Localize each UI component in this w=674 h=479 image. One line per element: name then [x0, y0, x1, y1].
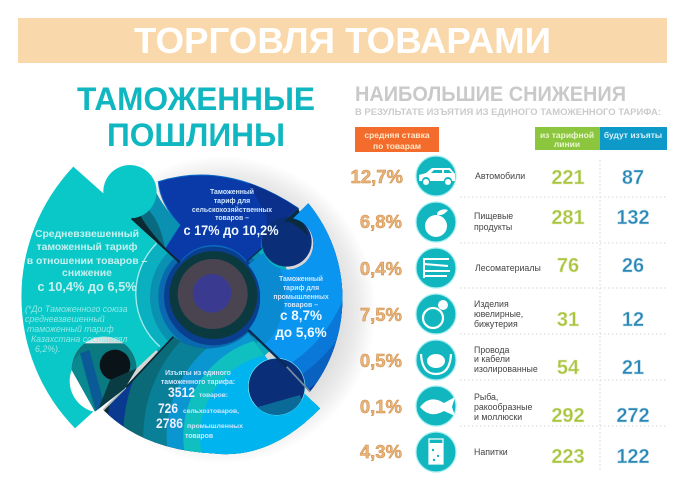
tab shadow: top-left stripes [132, 193, 180, 263]
text: removed goods: промышленных [187, 423, 243, 430]
row: jewellery: 12 [622, 309, 644, 331]
row: food: 132 [616, 207, 650, 229]
text: agricultural tariff [184, 188, 278, 238]
puzzle disc [21, 165, 342, 454]
row: fish: 272 [616, 405, 650, 427]
column header: average rate: по товарам [373, 141, 421, 151]
row: cars: 12,7% [351, 166, 403, 187]
column header: will be removed: будут изъяты [604, 130, 662, 140]
column header: average rate: средняя ставка [364, 130, 430, 140]
text: industrial tariff: товаров – [284, 302, 318, 309]
piece: removed goods [102, 332, 320, 454]
text: industrial tariff: Таможенный [279, 275, 323, 283]
text: agricultural tariff: сельскохозяйственных [192, 206, 272, 214]
column header: from tariff line: линии [554, 139, 580, 149]
text: removed goods: товаров [185, 433, 213, 440]
row: jewellery [360, 294, 644, 334]
row: timber [360, 248, 644, 288]
row: fish: Рыба, [474, 392, 498, 402]
heading: customs duties: ПОШЛИНЫ [107, 117, 285, 153]
icon: glass [429, 439, 443, 464]
row: beverages: Напитки [474, 447, 508, 457]
row: jewellery: 7,5% [360, 304, 402, 325]
row: food [360, 202, 650, 242]
row: jewellery: 31 [557, 309, 579, 331]
row: fish: и моллюски [474, 412, 522, 422]
text: footnote: 6,2%). [35, 344, 60, 354]
text: average tariff: в отношении товаров – [27, 256, 147, 267]
row: timber: 0,4% [360, 258, 402, 279]
text: footnote: таможенный тариф [27, 324, 114, 334]
text: industrial tariff: до 5,6% [275, 325, 327, 340]
heading: customs duties: ТАМОЖЕННЫЕ [77, 81, 315, 117]
heading: biggest reductions: НАИБОЛЬШИЕ СНИЖЕНИЯ [355, 83, 626, 106]
text: average tariff: с 10,4% до 6,5% [37, 279, 137, 294]
row: cars: Автомобили [475, 171, 525, 181]
text: removed goods: таможенного тарифа: [161, 379, 235, 386]
row: jewellery: Изделия [474, 299, 509, 309]
row: cables: Провода [474, 345, 510, 355]
heading: biggest reductions: В РЕЗУЛЬТАТЕ ИЗЪЯТИЯ ИЗ ЕДИНОГО ТАМОЖЕННОГО ТАРИФА: [355, 107, 661, 118]
text: agricultural tariff: тариф для [214, 198, 250, 205]
column header: average rate [355, 127, 439, 152]
text: agricultural tariff: товаров – [215, 215, 249, 222]
row: jewellery: ювелирные, [474, 309, 523, 319]
row: cables: изолированные [474, 364, 538, 374]
column header: from tariff line [535, 127, 600, 150]
row: timber: 76 [557, 255, 579, 277]
row: beverages: 122 [616, 446, 650, 468]
text: removed goods: 2786 [156, 415, 183, 431]
row: cables: и кабели [474, 354, 510, 364]
text: industrial tariff: с 8,7% [280, 308, 322, 323]
row: fish: 0,1% [360, 396, 402, 417]
row: cables: 54 [557, 357, 580, 379]
text: average tariff: снижение [62, 268, 112, 279]
piece: average tariff [21, 165, 180, 428]
text: removed goods: сельхозтоваров, [183, 408, 239, 415]
row: cables [360, 340, 644, 380]
text: industrial tariff: промышленных [273, 294, 329, 301]
hub rings [135, 218, 292, 375]
icon: ring [423, 300, 448, 328]
heading: customs duties [77, 81, 315, 153]
text: footnote [25, 304, 128, 354]
row: fish: 292 [551, 405, 585, 427]
row: beverages [360, 432, 650, 472]
row: beverages: 223 [551, 446, 585, 468]
text: industrial tariff: тариф для [283, 285, 319, 292]
text: footnote: (*До Таможенного союза [25, 304, 128, 314]
row: timber: Лесоматериалы [475, 263, 541, 273]
notch: bottom-left striped circle [72, 343, 137, 412]
text: removed goods [156, 370, 243, 440]
text: average tariff: таможенный тариф [36, 241, 138, 253]
notch: bottom-right dark circle [248, 358, 310, 417]
row: food: 281 [551, 207, 585, 229]
row: timber: 26 [622, 255, 644, 277]
disc shadow [68, 156, 376, 464]
row: food: Пищевые [474, 211, 513, 221]
row: fish: ракообразные [474, 402, 532, 412]
text: removed goods: 3512 [168, 384, 195, 400]
text: average tariff: Средневзвешенный [35, 229, 139, 240]
text: removed goods: Изъяты из единого [165, 370, 231, 377]
icon: car [419, 168, 455, 185]
text: agricultural tariff: Таможенный [210, 188, 254, 196]
title banner [18, 18, 667, 63]
text: average tariff [27, 229, 147, 294]
text: agricultural tariff: с 17% до 10,2% [184, 223, 278, 238]
row: food: продукты [474, 222, 512, 232]
row: cars [351, 156, 644, 196]
row: cars: 221 [551, 167, 585, 189]
piece: industrial tariff [248, 203, 342, 392]
row: beverages: 4,3% [360, 441, 402, 462]
piece: agricultural tariff [158, 167, 300, 263]
row: cables: 21 [622, 357, 644, 379]
icon: timber [423, 258, 450, 278]
icon: fish [420, 397, 455, 416]
row: fish [360, 386, 650, 427]
tab: top-right dark circle [262, 208, 312, 267]
title banner: ТОРГОВЛЯ ТОВАРАМИ [134, 20, 551, 61]
row: cars: 87 [622, 167, 644, 189]
icon: cable [421, 354, 451, 374]
column header: from tariff line: из тарифной [540, 130, 594, 140]
text: removed goods: товаров: [199, 392, 228, 399]
row: jewellery: бижутерия [474, 319, 518, 329]
text: footnote: Казахстана составлял [31, 334, 128, 344]
row: cables: 0,5% [360, 350, 402, 371]
text: footnote: средневзвешенный [25, 314, 105, 324]
column header: will be removed [600, 127, 667, 150]
text: removed goods: 726 [158, 400, 178, 416]
heading: biggest reductions [355, 83, 661, 118]
row: food: 6,8% [360, 211, 402, 232]
icon: apple [425, 209, 448, 237]
text: industrial tariff [273, 275, 329, 340]
